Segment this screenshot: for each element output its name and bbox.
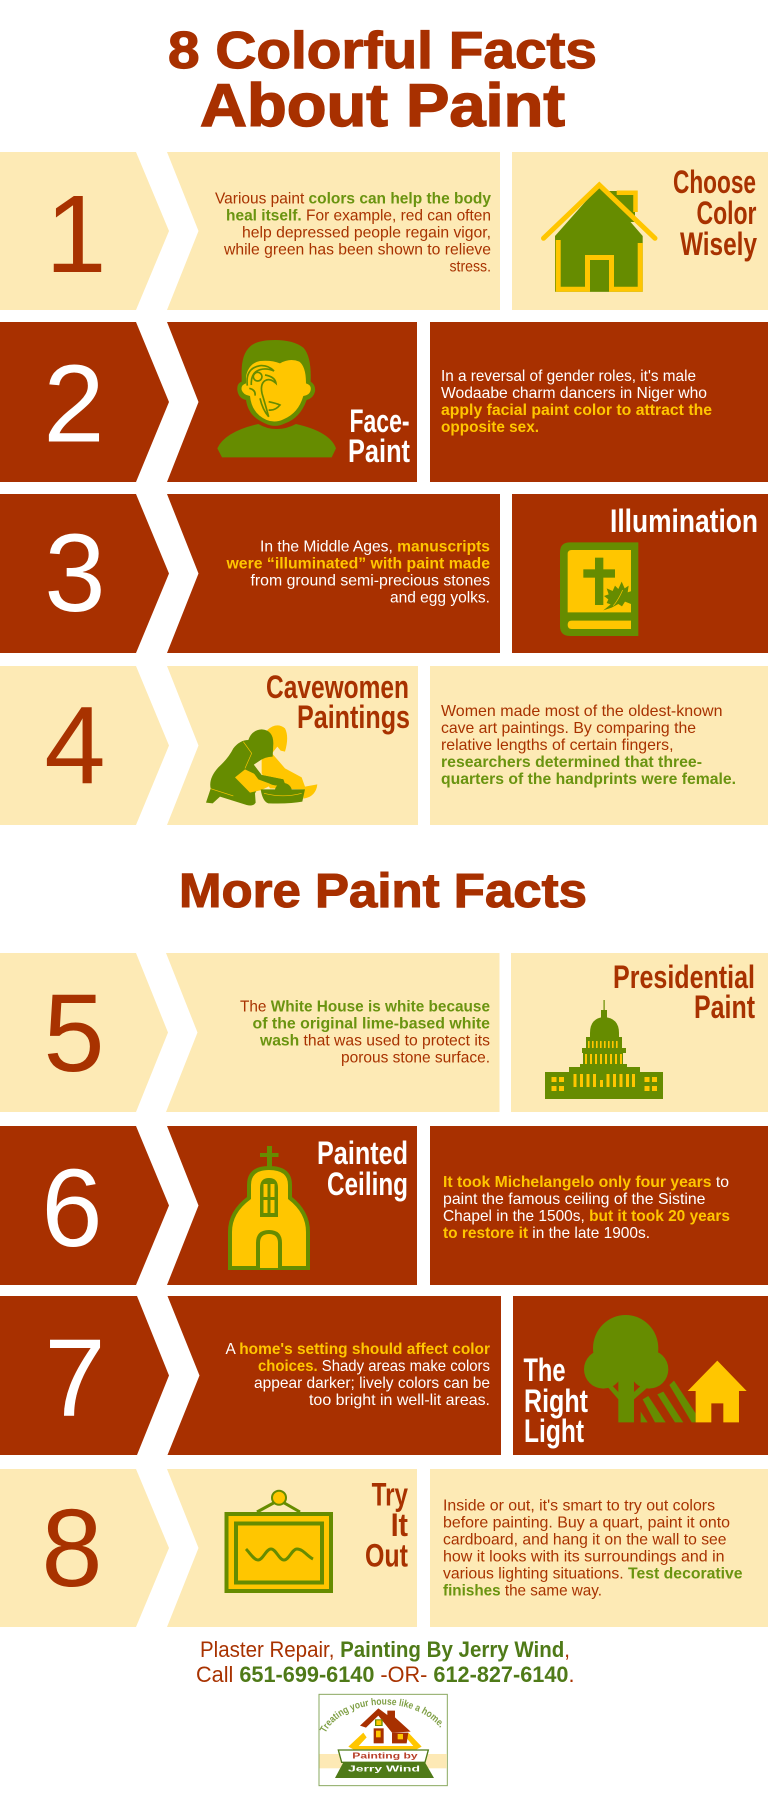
heading: More Paint Facts: More Paint Facts xyxy=(179,865,587,918)
fact 2 text: In a reversal of gender roles, it's male xyxy=(441,368,696,385)
fact 1 text: Various paint colors can help the body xyxy=(215,190,491,208)
number 3 chevron xyxy=(0,494,169,653)
fact 1 text: heal itself. For example, red can often xyxy=(226,208,491,224)
fact 5 text xyxy=(166,953,500,1112)
number 1 chevron xyxy=(0,152,169,310)
fact 8 text: Inside or out, it's smart to try out colors xyxy=(443,1498,715,1515)
number 4 chevron xyxy=(0,666,169,825)
heading panel: Painted Ceiling xyxy=(167,1126,417,1285)
heading panel: Face-Paint: Paint xyxy=(348,433,410,469)
title: About Paint xyxy=(200,72,565,139)
heading panel: The Right Light xyxy=(513,1296,768,1455)
heading panel: Cavewomen Paintings: Cavewomen xyxy=(266,669,409,705)
icon: church xyxy=(230,1146,308,1268)
heading panel: Cavewomen Paintings: Paintings xyxy=(297,699,410,735)
number 5 chevron xyxy=(0,953,168,1112)
fact 7 text: too bright in well-lit areas. xyxy=(309,1392,490,1409)
fact 4 text: quarters of the handprints were female. xyxy=(441,771,736,788)
panel: fact 4 xyxy=(0,666,768,825)
title xyxy=(168,22,597,139)
fact 2 text xyxy=(430,322,768,482)
fact 4 text xyxy=(430,666,768,825)
panel: fact 1 xyxy=(0,152,768,310)
fact 1 text: stress. xyxy=(450,258,491,276)
fact 2 text: Wodaabe charm dancers in Niger who xyxy=(441,385,707,402)
heading panel: Cavewomen Paintings xyxy=(167,666,418,825)
heading panel: Choose Color Wisely xyxy=(512,152,768,310)
icon: house xyxy=(544,185,655,292)
fact 1 text xyxy=(167,152,500,310)
footer contact text xyxy=(196,1637,575,1687)
heading panel: Face-Paint xyxy=(167,322,417,482)
heading panel: Illumination xyxy=(512,494,768,653)
fact 6 text: It took Michelangelo only four years to xyxy=(443,1174,729,1191)
fact 3 text: In the Middle Ages, manuscripts xyxy=(260,538,490,556)
logo: Painting by Jerry Wind: Jerry Wind xyxy=(348,1763,420,1773)
number 4 chevron: 4 xyxy=(44,684,106,807)
fact 5 text: of the original lime-based white xyxy=(252,1016,490,1032)
fact 8 text: finishes the same way. xyxy=(443,1582,602,1600)
title: 8 Colorful Facts xyxy=(168,22,597,80)
heading panel: Try It Out: Out xyxy=(365,1538,408,1574)
panel: fact 8 xyxy=(0,1469,768,1627)
fact 4 text: cave art paintings. By comparing the xyxy=(441,720,696,737)
fact 6 text: paint the famous ceiling of the Sistine xyxy=(443,1191,706,1208)
fact 3 text: from ground semi-precious stones xyxy=(250,572,490,590)
fact 2 text: opposite sex. xyxy=(441,419,539,436)
fact 8 text xyxy=(430,1469,768,1627)
number 6 chevron: 6 xyxy=(41,1147,103,1270)
icon: capitol building xyxy=(545,1000,663,1099)
icon: book with cross xyxy=(560,542,638,636)
footer contact text: Call 651-699-6140 -OR- 612-827-6140. xyxy=(196,1662,575,1687)
number 8 chevron: 8 xyxy=(41,1487,103,1610)
heading panel: The Right Light: Light xyxy=(524,1413,584,1449)
icon: tree, lawn and house xyxy=(584,1315,747,1422)
heading panel: Presidential Paint xyxy=(511,953,768,1112)
logo: Painting by Jerry Wind xyxy=(318,1694,448,1786)
heading panel: Painted Ceiling: Ceiling xyxy=(327,1166,408,1202)
fact 7 text xyxy=(168,1296,501,1455)
fact 6 text: Chapel in the 1500s, but it took 20 years xyxy=(443,1208,730,1225)
icon: cavewomen painting xyxy=(206,725,317,805)
fact 5 text: wash that was used to protect its xyxy=(259,1032,490,1050)
fact 1 text: while green has been shown to relieve xyxy=(223,242,491,258)
fact 5 text: porous stone surface. xyxy=(341,1050,490,1066)
fact 6 text xyxy=(430,1126,768,1285)
fact 3 text: were “illuminated” with paint made xyxy=(226,556,490,572)
panel: fact 5 xyxy=(0,953,768,1112)
number 2 chevron xyxy=(0,322,169,482)
fact 7 text: choices. Shady areas make colors xyxy=(258,1358,490,1375)
number 7 chevron: 7 xyxy=(44,1317,106,1440)
fact 7 text: appear darker; lively colors can be xyxy=(254,1375,490,1392)
heading panel: The Right Light: Right xyxy=(524,1383,588,1419)
fact 7 text: A home's setting should affect color xyxy=(226,1341,490,1358)
heading panel: Face-Paint: Face- xyxy=(350,403,410,439)
fact 4 text: researchers determined that three- xyxy=(441,754,702,771)
icon: hanging picture xyxy=(224,1491,333,1593)
fact 2 text: apply facial paint color to attract the xyxy=(441,402,712,419)
fact 8 text: before painting. Buy a quart, paint it onto xyxy=(443,1515,730,1532)
fact 6 text: to restore it in the late 1900s. xyxy=(443,1225,650,1242)
fact 8 text: how it looks with its surroundings and in xyxy=(443,1548,724,1566)
heading panel: Try It Out: It xyxy=(391,1507,408,1543)
number 8 chevron xyxy=(0,1469,169,1627)
fact 3 text: and egg yolks. xyxy=(390,590,490,606)
fact 1 text: help depressed people regain vigor, xyxy=(242,224,491,242)
footer contact text: Plaster Repair, Painting By Jerry Wind, xyxy=(200,1637,570,1662)
panel: fact 2 xyxy=(0,322,768,482)
fact 8 text: various lighting situations. Test decorative xyxy=(443,1566,743,1582)
heading panel: The Right Light: The xyxy=(524,1352,566,1388)
number 3 chevron: 3 xyxy=(44,512,106,635)
panel: fact 7 xyxy=(0,1296,768,1455)
number 6 chevron xyxy=(0,1126,169,1285)
fact 4 text: relative lengths of certain fingers, xyxy=(441,737,674,754)
number 7 chevron xyxy=(0,1296,169,1455)
fact 3 text xyxy=(167,494,500,653)
logo: Painting by Jerry Wind: Treating your house like a home. xyxy=(320,1698,442,1732)
fact 5 text: The White House is white because xyxy=(240,998,490,1016)
fact 8 text: cardboard, and hang it on the wall to see xyxy=(443,1532,727,1548)
logo: Painting by Jerry Wind: Painting by xyxy=(352,1751,418,1761)
heading panel: Try It Out: Try xyxy=(372,1477,408,1513)
number 1 chevron: 1 xyxy=(45,173,107,296)
number 5 chevron: 5 xyxy=(43,972,105,1095)
number 2 chevron: 2 xyxy=(43,342,105,466)
icon: painted face xyxy=(217,340,336,457)
fact 4 text: Women made most of the oldest-known xyxy=(441,703,722,720)
heading panel: Painted Ceiling: Painted xyxy=(317,1135,408,1171)
heading panel: Try It Out xyxy=(167,1469,417,1627)
panel: fact 6 xyxy=(0,1126,768,1285)
panel: fact 3 xyxy=(0,494,768,653)
